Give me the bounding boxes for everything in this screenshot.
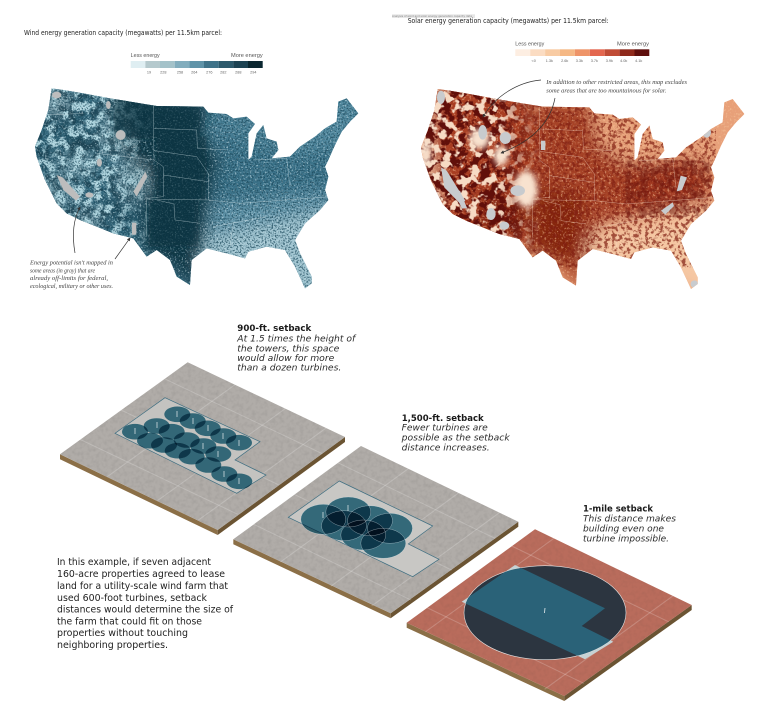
legend: solar: 4.1k <box>635 59 642 63</box>
text: explanatory paragraph: neighboring properties. <box>57 640 168 651</box>
annotation: wind restricted areas: some areas (in gray) that are <box>30 267 95 274</box>
annotation: wind restricted areas: already off-limits for federal, <box>30 275 108 282</box>
text: 900-ft setback: than a dozen turbines. <box>237 364 341 374</box>
legend: wind: 294 <box>250 70 256 74</box>
legend: solar: 3.3k <box>576 59 583 63</box>
text: explanatory paragraph: properties without touching <box>57 628 188 639</box>
legend: solar: 2.6k <box>561 59 568 63</box>
text: 1,500-ft setback <box>401 414 510 453</box>
text: explanatory paragraph: 160-acre properties agreed to lease <box>57 569 225 580</box>
text: 1-mile setback: This distance makes <box>583 515 676 525</box>
panel: 1-mile setback parcel <box>407 529 692 701</box>
legend: solar: 3.9k <box>606 59 613 63</box>
annotation: wind restricted areas <box>29 207 130 290</box>
text: 1,500-ft setback: Fewer turbines are <box>402 424 488 434</box>
text: explanatory paragraph: the farm that could fit on those <box>57 616 202 628</box>
legend: wind: 19 <box>147 70 151 74</box>
buildable overlap area <box>466 568 610 656</box>
annotation: solar mountainous exclusion: some areas that are too mountainous for solar. <box>546 88 666 94</box>
legend: wind: 264 <box>191 70 197 74</box>
legend: solar: 3.7k <box>591 59 598 63</box>
legend: solar <box>515 42 650 63</box>
text: 1,500-ft setback: distance increases. <box>402 443 490 453</box>
annotation: wind restricted areas: Energy potential isn't mapped in <box>29 260 113 266</box>
text: explanatory paragraph: In this example, if seven adjacent <box>57 557 211 568</box>
text: 900-ft setback: At 1.5 times the height of <box>236 335 357 345</box>
legend: wind: 282 <box>220 70 226 74</box>
legend: wind: 288 <box>235 70 241 74</box>
tiny grey source strip <box>392 14 475 18</box>
legend: solar: 4.0k <box>620 59 627 63</box>
panel: 1,500-ft setback parcel <box>233 446 518 618</box>
annotation: solar mountainous exclusion: In addition to other restricted areas, this map excludes <box>545 79 688 86</box>
text: explanatory paragraph: land for a utility-scale wind farm that <box>57 581 228 592</box>
map: solar energy <box>421 89 744 289</box>
lease boundary <box>462 565 613 659</box>
lease boundary <box>115 398 266 493</box>
text: explanatory paragraph <box>57 557 234 651</box>
text: explanatory paragraph: distances would determine the size of <box>57 604 234 616</box>
setback circle <box>464 566 626 660</box>
turbine <box>544 608 546 613</box>
legend: wind: 228 <box>160 70 166 74</box>
turbine setback circles <box>122 406 252 489</box>
text: explanatory paragraph: used 600-foot turbines, setback <box>57 593 208 604</box>
map: wind energy <box>35 88 358 288</box>
text: 1-mile setback: building even one <box>583 525 664 535</box>
legend: solar: 1.3k <box>546 59 553 63</box>
title: wind map: Wind energy generation capacity (megawatts) per 11.5km parcel: <box>24 28 222 37</box>
text: 900-ft setback: would allow for more <box>237 354 335 364</box>
legend: solar: Less energy <box>515 42 545 48</box>
lease boundary <box>288 481 439 577</box>
legend: wind: More energy <box>231 53 263 59</box>
annotation: wind restricted areas: ecological, military or other uses. <box>30 283 113 290</box>
tiny grey source strip: Analysis of wind and solar energy generation capacity data <box>392 14 472 18</box>
annotation: solar mountainous exclusion <box>483 79 688 153</box>
panel: 900-ft setback parcel <box>60 362 345 535</box>
text: 900-ft setback: 900-ft. setback <box>237 324 312 334</box>
text: 1,500-ft setback: 1,500-ft. setback <box>402 414 485 424</box>
turbine setback circles <box>301 497 412 558</box>
text: 1-mile setback: turbine impossible. <box>583 534 669 544</box>
text: 900-ft setback <box>236 324 357 374</box>
legend: wind: Less energy <box>131 53 160 59</box>
text: 900-ft setback: the towers, this space <box>237 344 340 354</box>
text: 1-mile setback <box>583 505 676 544</box>
legend: wind: 258 <box>177 70 183 74</box>
legend: wind <box>131 53 263 74</box>
text: 1,500-ft setback: possible as the setback <box>401 434 510 444</box>
text: 1-mile setback: 1-mile setback <box>583 505 654 515</box>
legend: solar: More energy <box>617 42 650 48</box>
title: solar map: Solar energy generation capacity (megawatts) per 11.5km parcel: <box>408 16 609 25</box>
legend: wind: 276 <box>206 70 212 74</box>
legend: solar: <0 <box>532 59 536 63</box>
